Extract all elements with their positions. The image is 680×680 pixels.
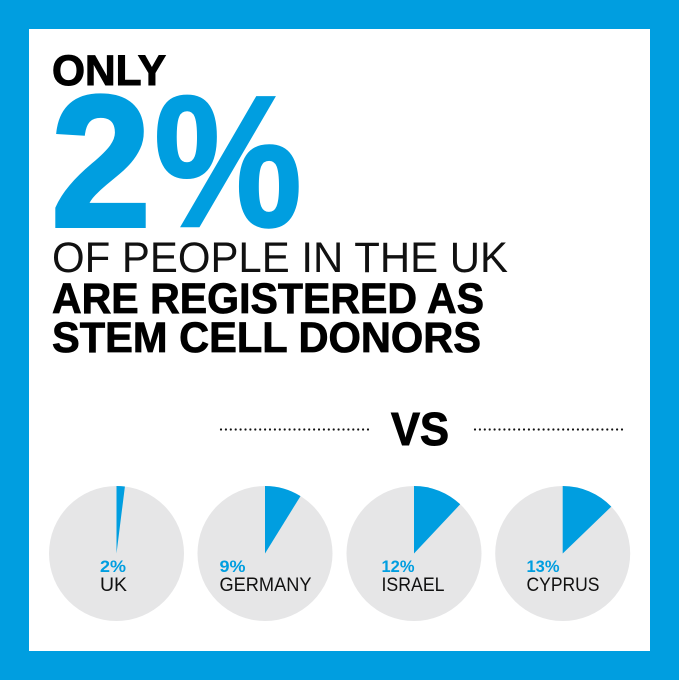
text: are registered as stem cell donors xyxy=(52,275,484,362)
pie: UK 2%: UK xyxy=(100,575,127,596)
pie: Germany 9% xyxy=(198,486,332,621)
pie: Cyprus 13%: CYPRUS xyxy=(526,575,600,596)
vs label: VS xyxy=(391,403,449,455)
text: are registered as stem cell donors: STEM CELL DONORS xyxy=(52,314,481,362)
pie: UK 2% xyxy=(49,486,184,621)
big number: 2%: 2 xyxy=(51,57,151,266)
pie: Israel 12%: 12% xyxy=(382,557,414,576)
pie: Israel 12%: ISRAEL xyxy=(382,575,444,596)
text: are registered as stem cell donors: ARE REGISTERED AS xyxy=(52,275,484,323)
heading: only: ONLY xyxy=(52,47,166,95)
pie: Cyprus 13% xyxy=(495,486,630,621)
big number: 2% xyxy=(51,57,302,266)
pie: UK 2%: 2% xyxy=(100,557,126,576)
pie: Germany 9%: GERMANY xyxy=(220,575,312,596)
pie: Germany 9%: 9% xyxy=(220,557,246,576)
text: of people in the UK: OF PEOPLE IN THE UK xyxy=(52,234,508,282)
pie: Israel 12% xyxy=(346,486,482,621)
big number: 2%: % xyxy=(154,57,302,266)
pie: Cyprus 13%: 13% xyxy=(526,557,560,576)
